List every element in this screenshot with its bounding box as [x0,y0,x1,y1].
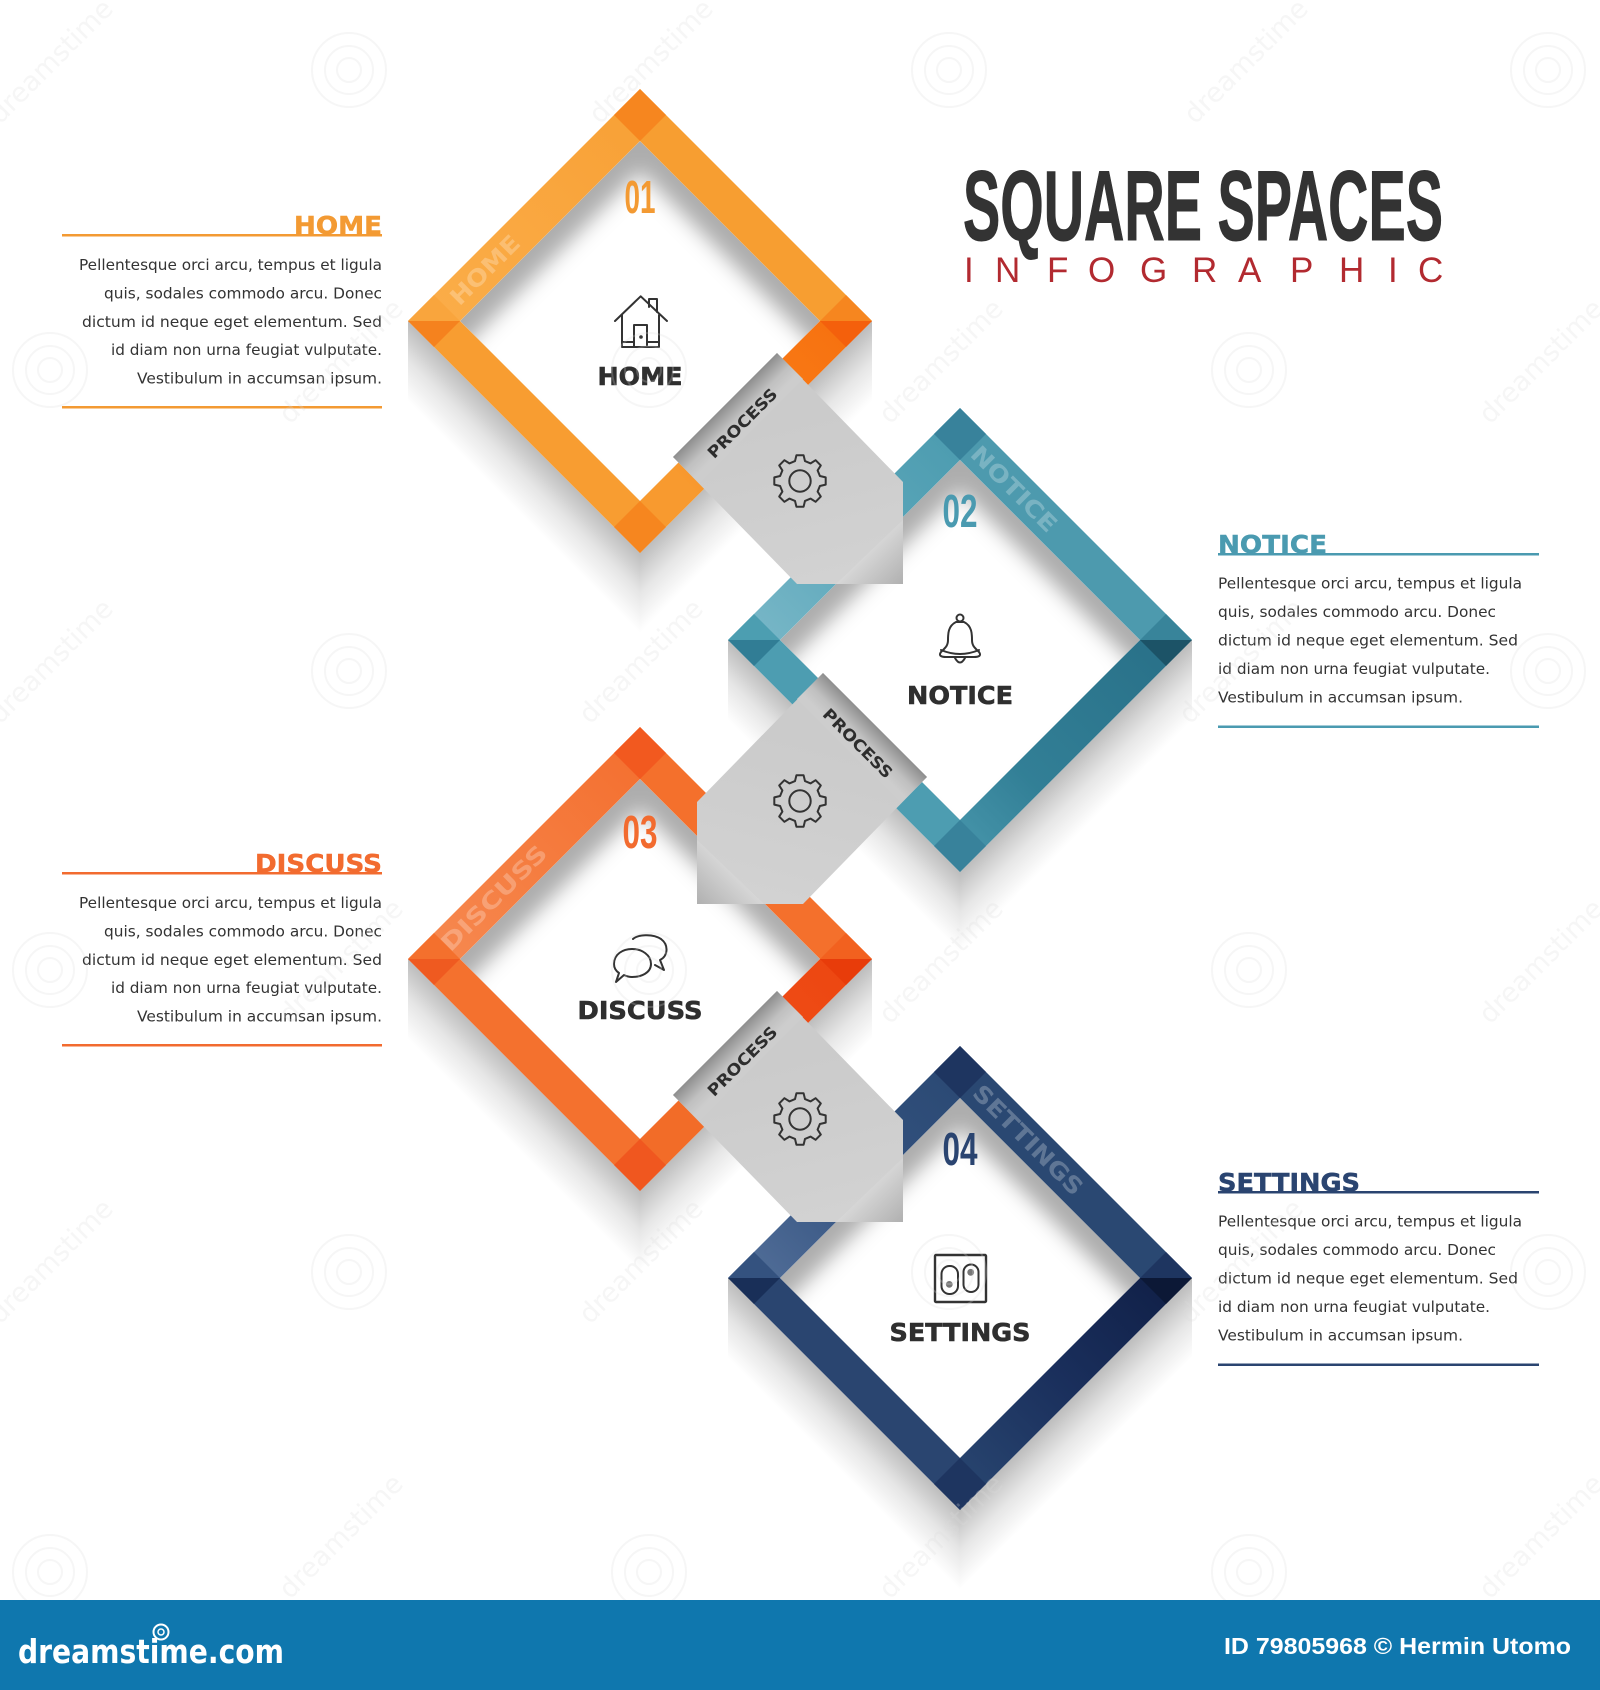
diamond 2: notice [728,408,1192,952]
number 04: 04 [942,1123,978,1175]
watermark pattern: dreamstime [873,293,1010,430]
process tab 2 [697,673,927,904]
process label 3: PROCESS [703,1022,781,1100]
text block: settings [1218,1168,1539,1366]
text block: home: HOME [294,211,382,240]
text block: home: Pellentesque orci arcu, tempus et ligula [79,256,382,274]
band label: notice: NOTICE [965,441,1062,538]
text block: settings: Pellentesque orci arcu, tempus et ligula [1218,1212,1522,1230]
text block: notice: Pellentesque orci arcu, tempus et ligula [1218,574,1522,592]
label: discuss: DISCUSS [578,996,702,1025]
number 03: 03 [622,806,658,858]
icon: house [615,296,667,347]
text block: home: dictum id neque eget elementum. Sed [82,313,382,331]
process label 2: PROCESS [819,704,897,782]
icon: gear 1 [774,455,826,507]
label: settings: SETTINGS [890,1318,1030,1347]
icon: bell [940,614,980,662]
diamond 4: settings [728,1046,1192,1590]
icon: gear 3 [774,1093,826,1145]
process label 1: PROCESS [703,384,781,462]
text block: settings: quis, sodales commodo arcu. Donec [1218,1241,1496,1259]
watermark pattern: dreamstime [273,893,410,1030]
footer credit: ID 79805968 © Hermin Utomo [1224,1633,1571,1659]
text block: discuss: DISCUSS [255,849,382,878]
watermark pattern: dreamstime [1173,1193,1310,1330]
process tab 1 [673,353,903,584]
text block: notice: quis, sodales commodo arcu. Donec [1218,603,1496,621]
watermark pattern: dreamstime [273,1468,410,1605]
text block: notice: NOTICE [1218,530,1327,559]
text block: home: Vestibulum in accumsan ipsum. [137,370,382,388]
text block: notice [1218,530,1539,728]
watermark pattern: dreamstime [873,1468,1010,1605]
text block: notice: Vestibulum in accumsan ipsum. [1218,688,1463,706]
text block: home: quis, sodales commodo arcu. Donec [104,284,382,302]
band label: discuss: DISCUSS [436,840,553,957]
footer logo: dreamstime.com [18,1632,284,1671]
watermark pattern: dreamstime [573,1193,710,1330]
icon: gear 2 [774,775,826,827]
watermark pattern: dreamstime [573,593,710,730]
icon: switch panel [935,1255,986,1302]
number 02: 02 [942,485,978,537]
diamond 3: discuss [408,727,872,1271]
label: home: HOME [597,362,683,391]
watermark pattern: dreamstime [273,293,410,430]
title line 2: INFOGRAPHIC [964,251,1443,290]
text block: discuss: dictum id neque eget elementum. Sed [82,951,382,969]
number 01: 01 [624,171,656,223]
footer bar [0,1600,1600,1690]
watermark pattern: dreamstime [873,893,1010,1030]
label: notice: NOTICE [907,681,1013,710]
band label: settings: SETTINGS [967,1080,1088,1201]
band label: home: HOME [445,230,526,311]
icon: speech bubbles [614,935,667,982]
text block: discuss: id diam non urna feugiat vulputate. [111,979,382,997]
process tab 3 [673,991,903,1222]
text block: discuss: Vestibulum in accumsan ipsum. [137,1008,382,1026]
text block: settings: SETTINGS [1218,1168,1360,1197]
title [963,150,1443,290]
text block: home [62,211,382,408]
text block: home: id diam non urna feugiat vulputate. [111,341,382,359]
text block: settings: id diam non urna feugiat vulputate. [1218,1298,1490,1316]
text block: discuss [62,849,382,1046]
diamond 1: home [408,89,872,633]
text block: settings: dictum id neque eget elementum. Sed [1218,1270,1518,1288]
text block: notice: dictum id neque eget elementum. Sed [1218,632,1518,650]
text block: discuss: Pellentesque orci arcu, tempus et ligula [79,894,382,912]
text block: settings: Vestibulum in accumsan ipsum. [1218,1326,1463,1344]
text block: notice: id diam non urna feugiat vulputate. [1218,660,1490,678]
watermark pattern: dreamstime [1173,593,1310,730]
text block: discuss: quis, sodales commodo arcu. Donec [104,922,382,940]
